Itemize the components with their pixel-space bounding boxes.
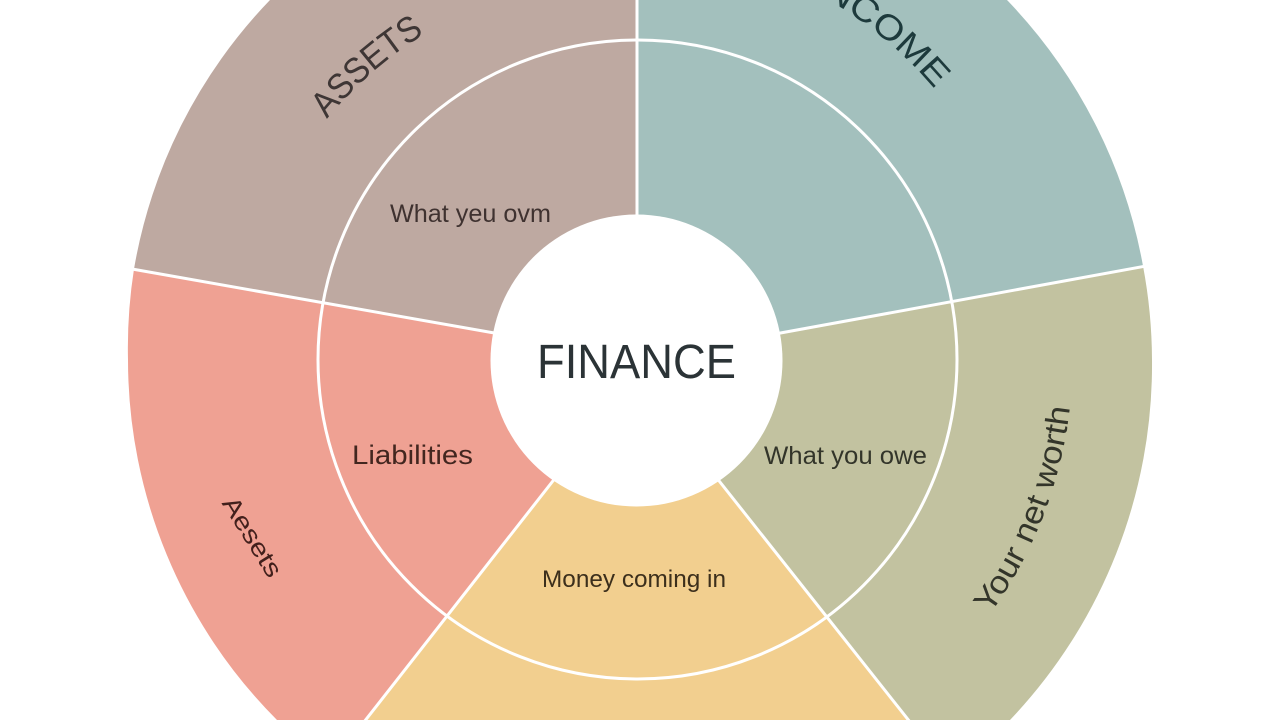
inner label: money coming in: Money coming in [542, 566, 726, 593]
divider lines [132, 0, 1146, 720]
sector: net worth [636, 266, 1152, 720]
inner label: what you owe: What you owe [764, 442, 927, 470]
title: FINANCE: FINANCE [537, 336, 736, 389]
centre circle [490, 214, 782, 506]
sector: money coming in [365, 375, 909, 720]
outer label: Assets: Aesets [216, 491, 288, 583]
inner label: liabilities: Liabilities [352, 440, 473, 470]
sector: liabilities [128, 269, 637, 720]
sector: income [637, 0, 1143, 360]
outer label: ASSETS: ASSETS [314, 16, 421, 119]
sector: assets [134, 0, 637, 360]
outer label: Your net worth: Your net worth [972, 408, 1070, 606]
inner label: what you own: What yeu ovm [390, 200, 551, 228]
